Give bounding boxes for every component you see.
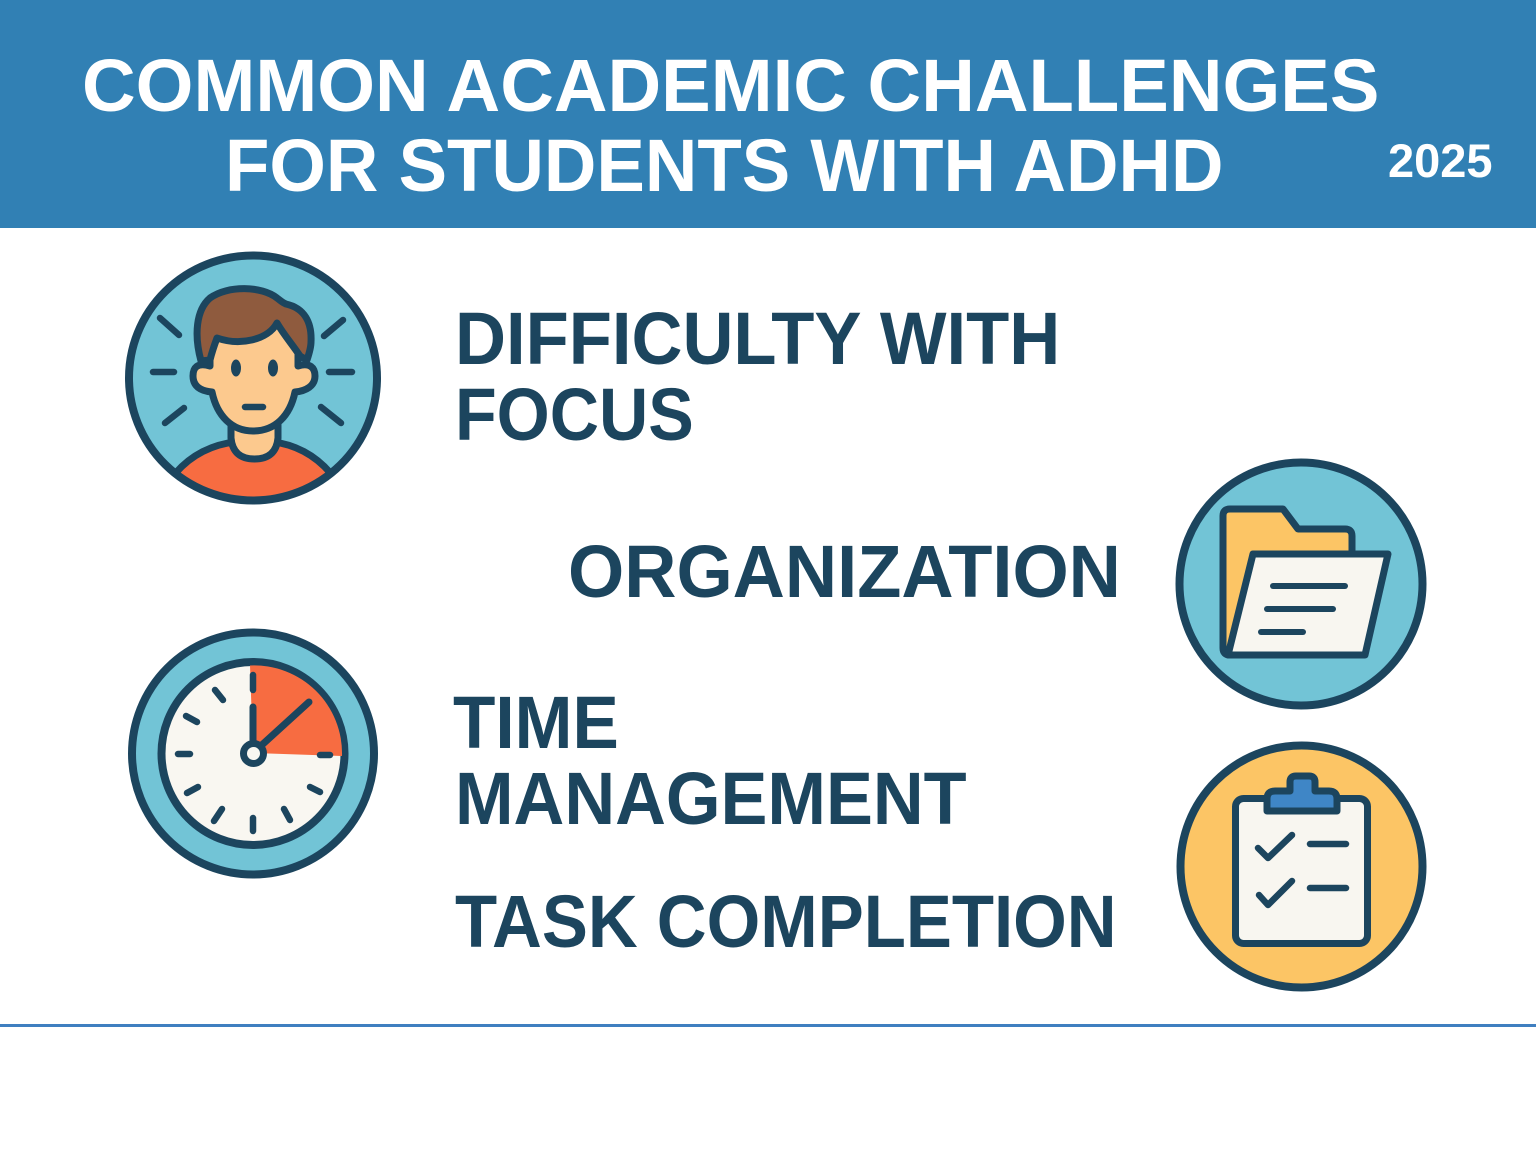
icon: clock: [128, 628, 378, 878]
label: time management: [453, 681, 967, 840]
label line: time: TIME: [453, 681, 619, 764]
label line: focus: FOCUS: [455, 373, 694, 456]
label: difficulty with focus: [455, 297, 1060, 456]
label: task completion: TASK COMPLETION: [455, 880, 1117, 963]
label line: difficulty with: DIFFICULTY WITH: [455, 297, 1060, 380]
year: 2025: [1388, 134, 1493, 187]
title line 2: FOR STUDENTS WITH ADHD: [225, 124, 1223, 207]
icon: distracted student: [125, 252, 381, 504]
icon: folder: [1176, 458, 1426, 710]
icon: clipboard checklist: [1176, 742, 1426, 992]
footer divider line: [0, 1024, 1536, 1027]
label: organization: ORGANIZATION: [568, 530, 1121, 613]
header banner: [0, 0, 1536, 228]
label line: management: MANAGEMENT: [455, 757, 967, 840]
title line 1: COMMON ACADEMIC CHALLENGES: [82, 44, 1379, 127]
